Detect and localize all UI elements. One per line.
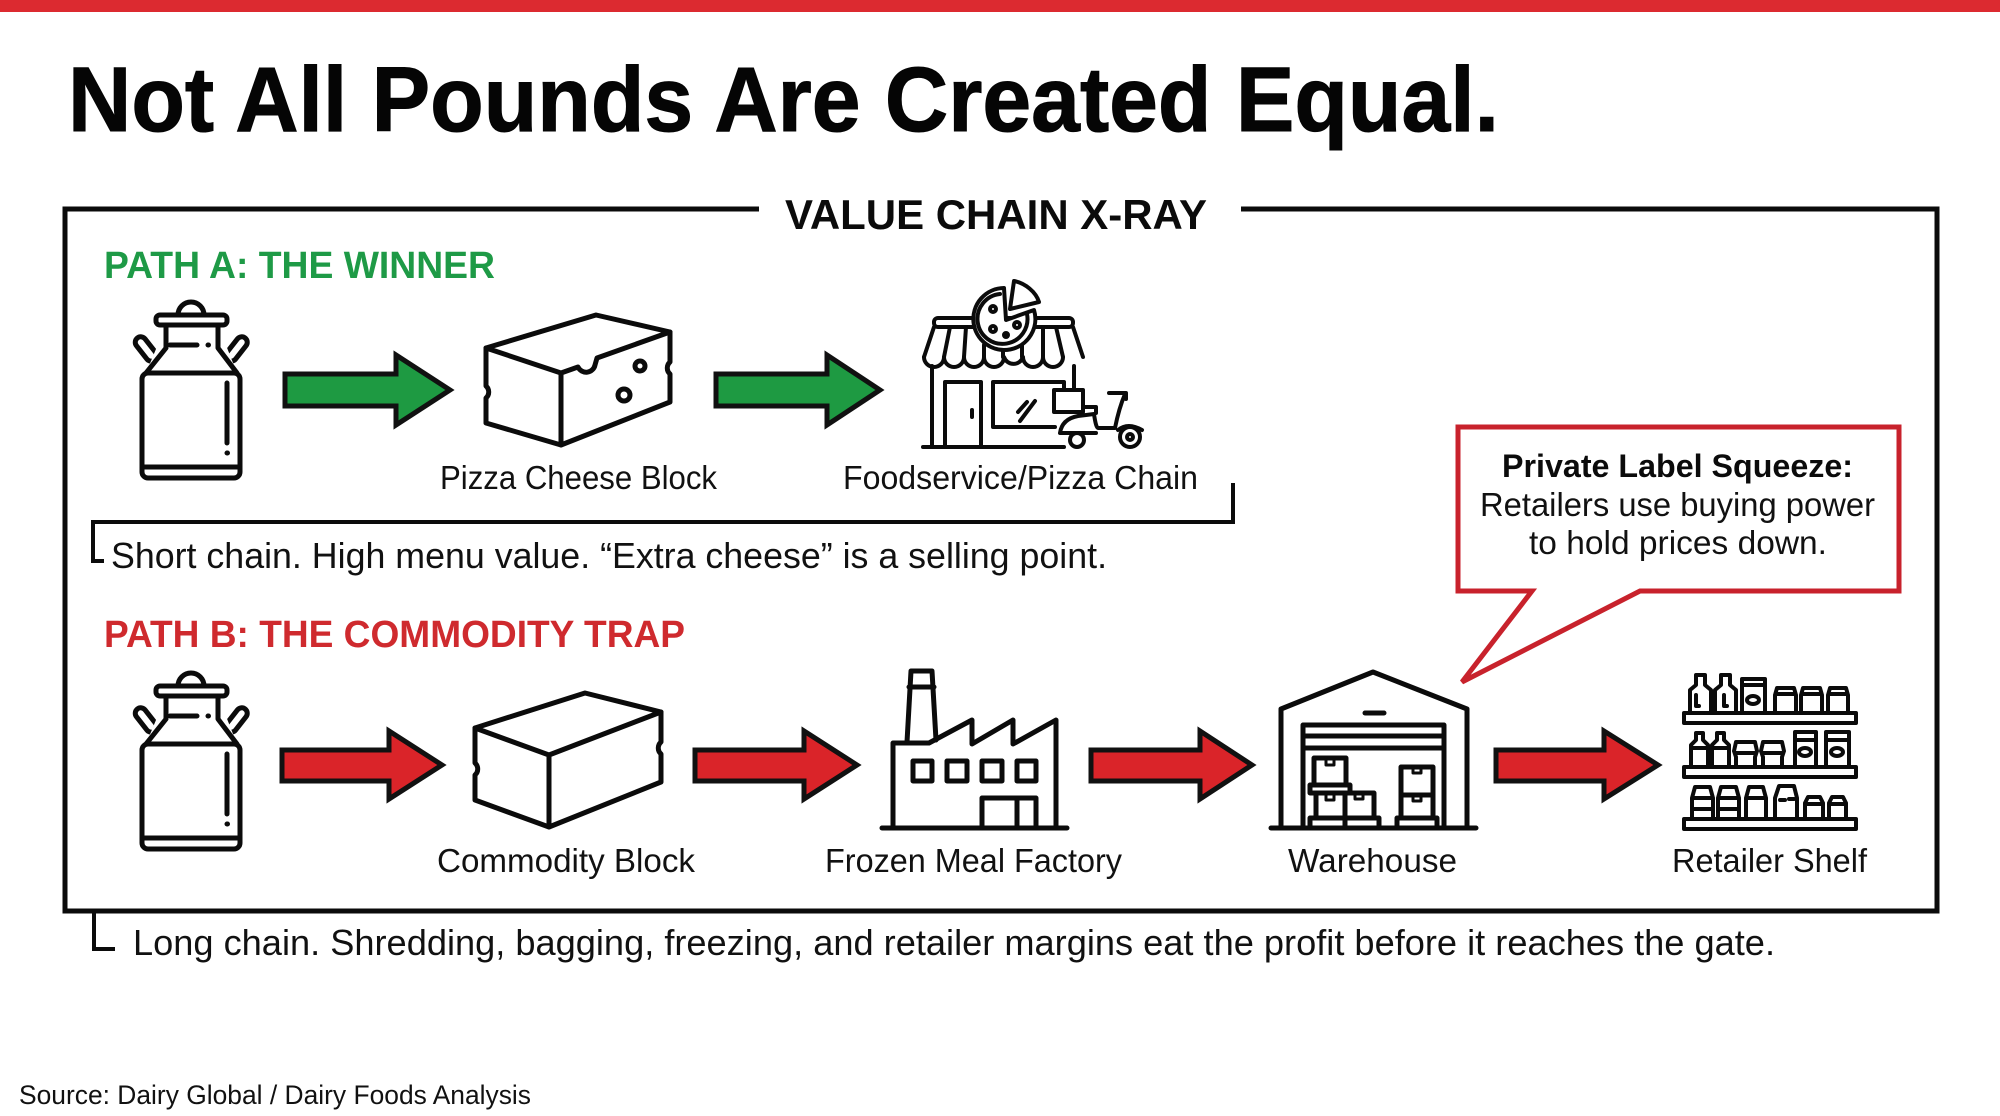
- callout speech bubble: [1458, 427, 1899, 682]
- arrow: red 3: [1091, 731, 1252, 799]
- source note: Source: Dairy Global / Dairy Foods Analysis: [19, 1080, 531, 1110]
- icon: retailer shelf: [1684, 675, 1856, 829]
- arrow: red 4: [1496, 731, 1658, 799]
- arrow: green 1: [285, 355, 450, 425]
- bracket: path A summary: [93, 483, 1233, 561]
- label: commodity block: Commodity Block: [437, 842, 696, 879]
- icon: warehouse: [1271, 672, 1476, 828]
- callout line 1: Retailers use buying power: [1480, 486, 1875, 523]
- heading: path B: PATH B: THE COMMODITY TRAP: [104, 614, 685, 656]
- label: foodservice pizza chain: Foodservice/Pizza Chain: [843, 459, 1198, 496]
- arrow: red 1: [282, 731, 442, 799]
- top red bar: [0, 0, 2000, 12]
- icon: milk can A: [133, 302, 249, 478]
- icon: milk can B: [133, 673, 249, 849]
- title: Not All Pounds Are Created Equal.: [68, 49, 1499, 151]
- label: pizza cheese block: Pizza Cheese Block: [440, 459, 717, 496]
- text: path A summary: Short chain. High menu value. “Extra cheese” is a selling point.: [111, 535, 1107, 576]
- panel heading: VALUE CHAIN X-RAY: [785, 191, 1207, 238]
- text: path B summary: Long chain. Shredding, bagging, freezing, and retailer margins eat the profit before it reaches the gate.: [133, 922, 1775, 963]
- icon: pizza cheese block: [486, 315, 670, 445]
- icon: commodity block: [475, 693, 661, 827]
- panel: value chain x-ray frame: [65, 209, 1937, 911]
- label: warehouse: Warehouse: [1288, 842, 1457, 879]
- heading: path A: PATH A: THE WINNER: [104, 245, 495, 287]
- label: frozen meal factory: Frozen Meal Factory: [825, 842, 1122, 879]
- bracket: path B summary: [94, 912, 115, 949]
- callout line 2: to hold prices down.: [1529, 524, 1827, 561]
- arrow: green 2: [716, 355, 880, 425]
- label: retailer shelf: Retailer Shelf: [1672, 842, 1868, 879]
- callout: private label squeeze: [1458, 427, 1899, 682]
- icon: foodservice pizza shop with scooter: [923, 281, 1142, 447]
- icon: frozen meal factory: [882, 671, 1067, 828]
- arrow: red 2: [695, 731, 857, 799]
- callout heading: Private Label Squeeze:: [1502, 448, 1853, 484]
